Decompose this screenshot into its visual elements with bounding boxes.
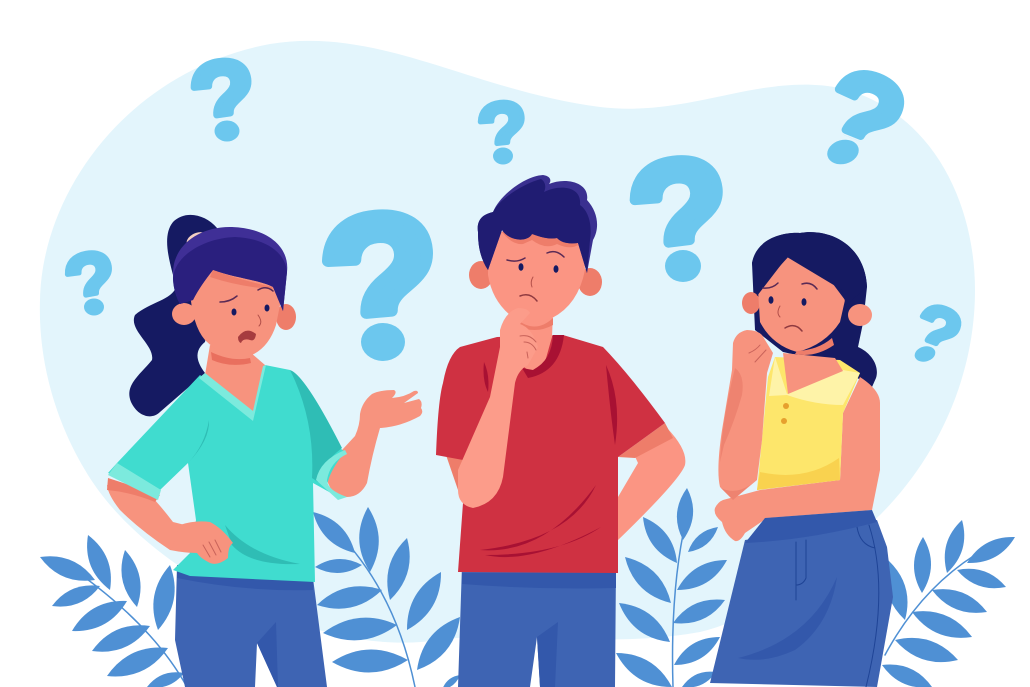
shirt sleeve fold bbox=[188, 420, 209, 463]
yellow top bbox=[757, 357, 860, 490]
sleeve cuff left bbox=[108, 463, 161, 500]
skirt fold bbox=[738, 577, 837, 660]
question marks: ? bbox=[312, 170, 450, 399]
waistband bbox=[745, 510, 877, 543]
plant: centre left bbox=[313, 507, 460, 687]
hair rim bbox=[173, 227, 287, 311]
ears bbox=[469, 261, 602, 296]
hand on hip bbox=[172, 521, 233, 564]
back hair bbox=[752, 232, 877, 387]
hair bbox=[478, 179, 591, 273]
person: left woman bbox=[107, 215, 422, 687]
facial features bbox=[507, 252, 564, 301]
question marks: ? bbox=[183, 34, 265, 163]
question marks: ? bbox=[800, 40, 923, 197]
forehead shadow bbox=[502, 225, 578, 247]
left arm bbox=[107, 485, 205, 553]
front hair bbox=[752, 232, 867, 305]
finger lines bbox=[203, 540, 221, 557]
ears bbox=[742, 292, 872, 326]
back arm under sleeve bbox=[446, 455, 466, 500]
right arm and hand bbox=[327, 390, 422, 497]
face bbox=[758, 255, 845, 352]
skirt seams bbox=[796, 525, 879, 687]
fingers bbox=[749, 345, 766, 362]
skirt bbox=[710, 520, 893, 687]
right arm bbox=[618, 428, 685, 540]
plant: far right bbox=[882, 520, 1015, 687]
face bbox=[190, 255, 285, 357]
hair rim bbox=[478, 175, 597, 273]
jeans bbox=[458, 565, 616, 687]
neck bbox=[205, 345, 265, 415]
facial features bbox=[763, 283, 817, 331]
question marks: ? bbox=[473, 83, 533, 181]
bare arm bbox=[715, 377, 880, 541]
shirt folds bbox=[480, 362, 617, 557]
ears bbox=[172, 303, 296, 330]
question marks: ? bbox=[619, 121, 741, 316]
facial features bbox=[220, 288, 273, 343]
teal shirt bbox=[108, 365, 345, 582]
person: right woman bbox=[710, 232, 893, 687]
question marks: ? bbox=[58, 232, 124, 333]
plant: centre right bbox=[616, 488, 727, 687]
collar bbox=[522, 335, 564, 378]
collar bbox=[769, 357, 860, 405]
raised arm and hand bbox=[718, 330, 773, 500]
plant: far left bbox=[40, 535, 187, 687]
face bbox=[488, 215, 585, 321]
thinking arm and hand bbox=[458, 308, 538, 508]
finger lines bbox=[520, 336, 536, 358]
neck bbox=[783, 353, 843, 394]
neck bbox=[513, 312, 553, 372]
shirt buttons bbox=[781, 403, 789, 424]
red shirt bbox=[436, 335, 665, 573]
shirt waist fold bbox=[225, 525, 300, 564]
question marks bbox=[58, 34, 972, 399]
collar bbox=[199, 365, 266, 421]
background blob bbox=[40, 41, 975, 643]
person: centre man bbox=[436, 175, 685, 687]
jeans bbox=[175, 565, 327, 687]
scrunchie bbox=[184, 229, 210, 251]
hair bbox=[173, 237, 287, 311]
sleeve cuff right bbox=[316, 450, 347, 500]
question marks: ? bbox=[901, 286, 972, 380]
shirt shading bbox=[290, 370, 342, 482]
ponytail bbox=[129, 215, 217, 416]
